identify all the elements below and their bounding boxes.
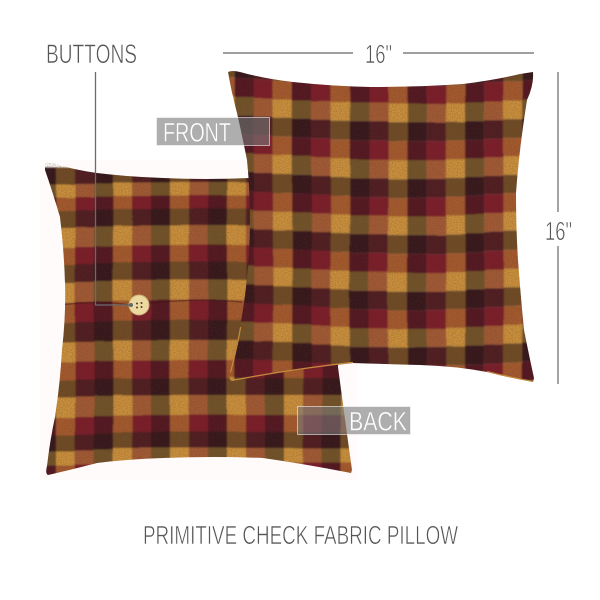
front pillow bottom rim	[230, 327, 533, 382]
title: PRIMITIVE CHECK FABRIC PILLOW	[143, 522, 458, 550]
heading: buttons label: BUTTONS	[46, 39, 137, 69]
dimension: height 16 inches: 16"	[545, 216, 572, 246]
panel: back pillow	[45, 162, 352, 475]
button leader line	[96, 72, 133, 307]
dimension: width 16 inches: 16"	[365, 39, 392, 69]
label: back: BACK	[349, 406, 407, 436]
label: back	[298, 406, 410, 436]
label: front: FRONT	[163, 118, 231, 148]
icon: button	[129, 295, 149, 315]
panel: front pillow	[228, 71, 534, 382]
back pillow halo	[40, 160, 358, 480]
